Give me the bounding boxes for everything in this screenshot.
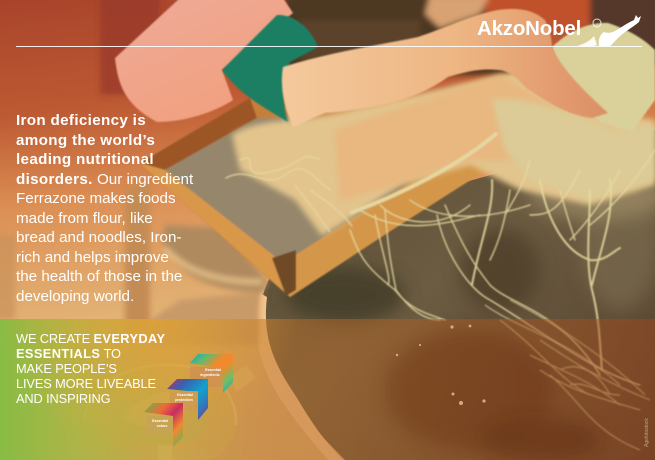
body text: Ferrazone makes foods — [16, 190, 176, 207]
chevron: essential protection: Essential — [177, 393, 193, 397]
chevron: essential ingredients: ingredients — [200, 373, 220, 377]
body text: disorders. Our ingredient — [16, 171, 193, 188]
wooden tray — [140, 98, 520, 297]
metal pot under tray — [150, 225, 268, 345]
tagline: LIVES MORE LIVEABLE — [16, 376, 156, 391]
hanging noodle strands — [226, 150, 655, 385]
pot rim — [257, 293, 345, 460]
body text: developing world. — [16, 288, 134, 305]
body text: the health of those in the — [16, 268, 182, 285]
tagline: ESSENTIALS TO — [16, 346, 121, 361]
body text: among the world’s — [16, 132, 155, 149]
AkzoNobel figure icon — [577, 15, 641, 46]
body text: bread and noodles, Iron- — [16, 229, 182, 246]
lower tone over scene — [0, 319, 655, 460]
chevron: essential ingredients — [190, 354, 233, 393]
tagline: AND INSPIRING — [16, 391, 110, 406]
tagline: MAKE PEOPLE’S — [16, 361, 117, 376]
tagline: WE CREATE EVERYDAY — [16, 331, 165, 346]
colour band over lower page — [0, 319, 655, 460]
forearm and hand — [282, 9, 608, 127]
background: dark top area and red panel — [0, 0, 655, 330]
chevron: essential colors — [144, 403, 183, 447]
tagline — [16, 331, 165, 406]
steaming pot interior — [262, 130, 655, 460]
chevron: essential protection — [167, 379, 208, 420]
noodle bundle in hand — [552, 23, 655, 132]
body text: rich and helps improve — [16, 249, 169, 266]
shirt sleeve — [115, 0, 293, 122]
photo credit, vertical: Agefotostock — [644, 418, 650, 447]
soup highlights — [396, 325, 486, 405]
horizontal rule — [16, 46, 642, 47]
chevron: essential protection: protection — [175, 398, 193, 402]
saucepan — [85, 365, 256, 460]
body text: made from flour, like — [16, 210, 153, 227]
noodle mass on tray — [232, 70, 655, 236]
chevron: essential ingredients: Essential — [205, 368, 221, 372]
noodle clump in pot — [485, 300, 650, 450]
body text: leading nutritional — [16, 151, 154, 168]
logo wordmark: AkzoNobel — [477, 17, 581, 40]
chevron: essential colors: colors — [157, 424, 167, 428]
chevron: essential colors: Essential — [152, 419, 168, 423]
body text — [16, 112, 194, 305]
body text: Iron deficiency is — [16, 112, 146, 129]
green cuff — [222, 15, 318, 122]
